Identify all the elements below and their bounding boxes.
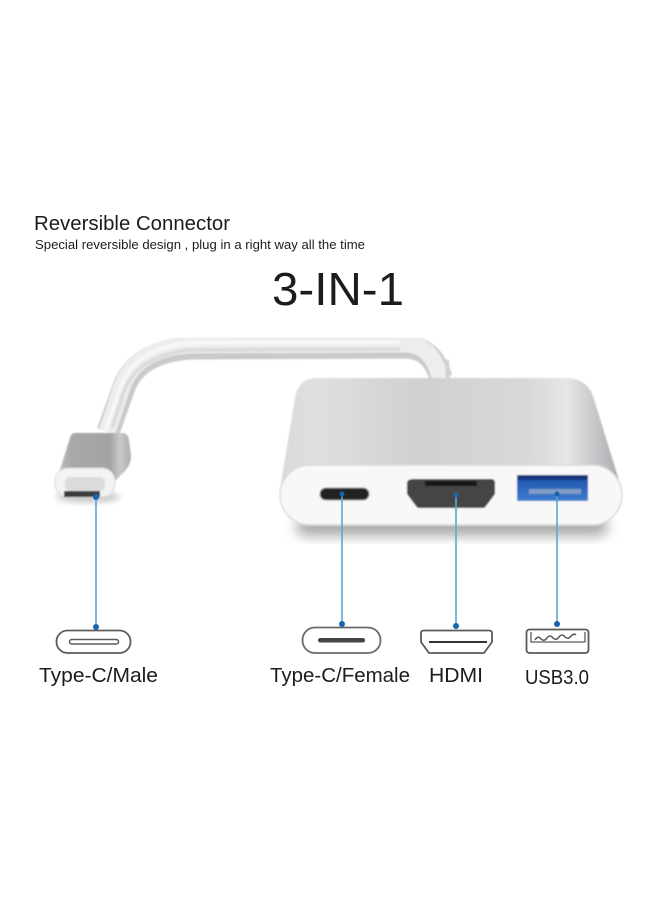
icon: usb [526, 630, 588, 653]
hub silver body [280, 378, 622, 490]
hub shadow [296, 516, 608, 536]
icon: type-c male [56, 630, 130, 653]
port: hdmi [407, 479, 495, 508]
hub adapter [280, 378, 622, 536]
subheading: Special reversible design , plug in a right way all the time [35, 238, 365, 252]
label: type-c female: Type-C/Female [270, 664, 410, 687]
heading: reversible connector: Reversible Connector [34, 212, 230, 235]
label: usb 3.0: USB3.0 [525, 666, 589, 689]
heading: reversible connector [34, 212, 365, 252]
label: type-c male: Type-C/Male [39, 664, 158, 687]
type-c male plug [55, 433, 131, 503]
cable [106, 342, 448, 432]
plug housing [56, 433, 131, 482]
port: usb 3.0 [517, 475, 588, 501]
hub front face [280, 465, 622, 525]
title: 3-IN-1: 3-IN-1 [272, 263, 404, 315]
label: hdmi: HDMI [429, 664, 483, 687]
cable stem into hub [447, 360, 448, 380]
plug contacts [64, 491, 100, 497]
port: type-c female [320, 488, 369, 500]
blue leader lines [96, 494, 557, 627]
plug shadow [56, 491, 120, 503]
icon: type-c female [302, 628, 380, 653]
plug white tip [55, 468, 115, 497]
icon: hdmi [421, 630, 492, 653]
leader dots [93, 492, 560, 630]
